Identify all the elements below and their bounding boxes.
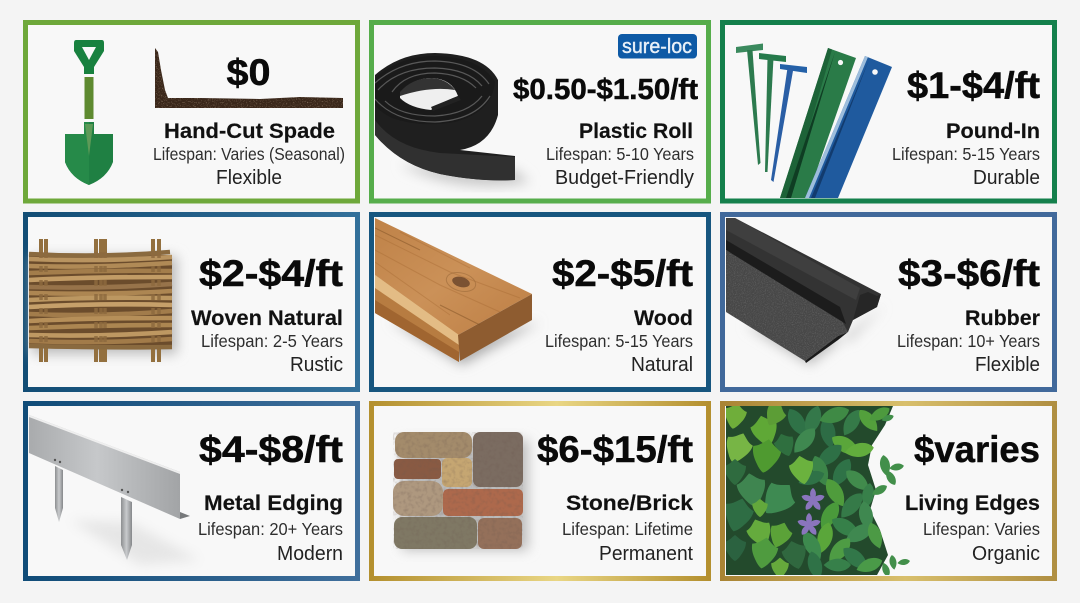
large ivy leaves xyxy=(726,406,813,575)
name: Wood xyxy=(634,307,693,330)
sprigs xyxy=(870,413,910,578)
lifespan: Lifespan: Varies xyxy=(923,519,1040,539)
image: ivy and periwinkle foliage xyxy=(726,406,910,575)
lifespan: Lifespan: 5-10 Years xyxy=(546,144,694,164)
panel: pound-in xyxy=(722,22,1054,201)
image: stacked stones and bricks xyxy=(393,432,528,550)
image: stakes and metal strips xyxy=(736,44,892,198)
name: Plastic Roll xyxy=(579,120,693,143)
name: Pound-In xyxy=(946,120,1040,143)
trait: Budget-Friendly xyxy=(555,167,694,189)
image: woven willow wattle xyxy=(29,239,177,362)
logo: sure-loc: sure-loc xyxy=(622,36,692,58)
trait: Natural xyxy=(631,354,693,376)
lifespan: Lifespan: 5-15 Years xyxy=(545,331,693,351)
lifespan: Lifespan: 20+ Years xyxy=(198,519,343,539)
panel: stone/brick xyxy=(372,404,708,578)
name: Metal Edging xyxy=(204,492,343,515)
price: $0.50-$1.50/ft xyxy=(513,74,698,106)
panel: metal edging xyxy=(26,404,358,578)
trait: Flexible xyxy=(975,354,1040,376)
lifespan: Lifespan: 2-5 Years xyxy=(201,331,343,351)
trait: Durable xyxy=(973,167,1040,189)
trait: Rustic xyxy=(290,354,343,376)
name: Woven Natural xyxy=(191,307,343,330)
panel: plastic roll xyxy=(372,22,708,201)
icon: cut soil profile xyxy=(155,48,343,108)
price: $varies xyxy=(914,429,1040,470)
icon: green spade xyxy=(65,40,113,185)
price: $3-$6/ft xyxy=(898,253,1040,294)
image: steel edging with stakes xyxy=(29,415,200,565)
small periwinkle leaves xyxy=(788,406,890,575)
price: $4-$8/ft xyxy=(199,429,343,470)
trait: Organic xyxy=(972,543,1040,565)
panel: living edges xyxy=(720,400,1054,582)
price: $1-$4/ft xyxy=(907,65,1040,106)
trait: Flexible xyxy=(216,167,282,189)
price: $2-$4/ft xyxy=(199,253,343,294)
lifespan: Lifespan: Lifetime xyxy=(562,519,693,539)
trait: Permanent xyxy=(599,543,693,565)
name: Rubber xyxy=(965,307,1040,330)
image: cedar wood board xyxy=(375,218,540,365)
panel: hand-cut spade xyxy=(26,22,358,201)
flowers xyxy=(797,488,825,536)
image: black rubber edging xyxy=(726,218,885,365)
lifespan: Lifespan: 5-15 Years xyxy=(892,144,1040,164)
price: $2-$5/ft xyxy=(552,253,693,294)
name: Hand-Cut Spade xyxy=(164,120,335,143)
price: $0 xyxy=(226,52,270,93)
name: Stone/Brick xyxy=(566,492,693,515)
trait: Modern xyxy=(277,543,343,565)
price: $6-$15/ft xyxy=(537,429,693,470)
lifespan: Lifespan: Varies (Seasonal) xyxy=(153,144,345,164)
panel: rubber xyxy=(722,214,1054,390)
lifespan: Lifespan: 10+ Years xyxy=(897,331,1040,351)
name: Living Edges xyxy=(905,492,1040,515)
panel: woven natural xyxy=(26,214,358,390)
image: coiled black plastic edging xyxy=(375,53,530,186)
panel: wood xyxy=(372,214,708,390)
